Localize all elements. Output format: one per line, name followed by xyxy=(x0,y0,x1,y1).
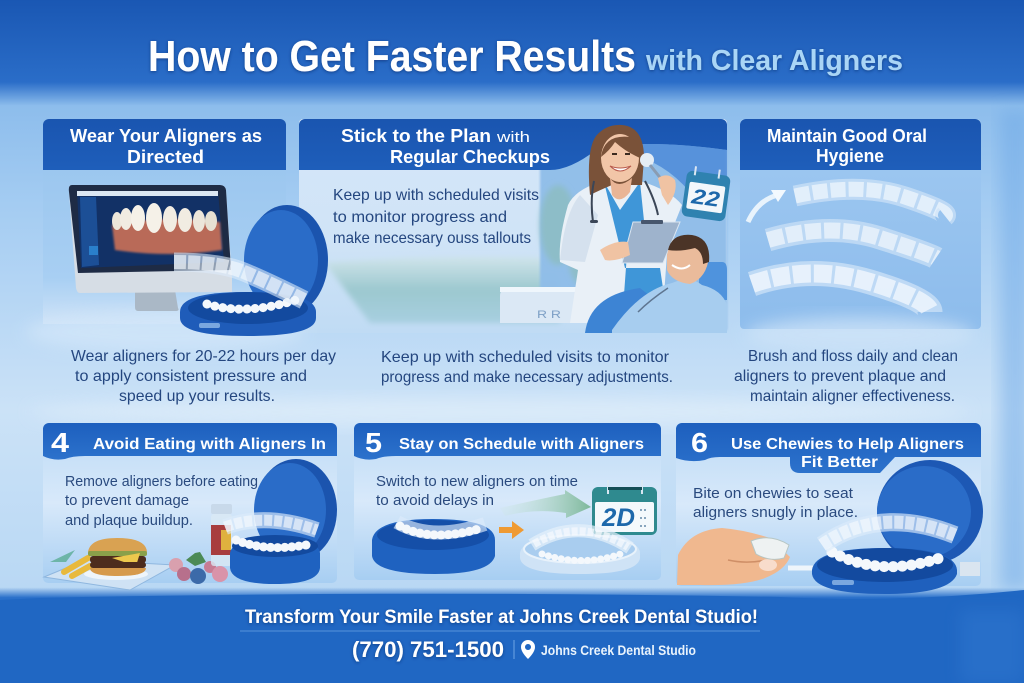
body text: aligners snugly in place. xyxy=(693,504,858,521)
caption: to apply consistent pressure and xyxy=(75,368,307,385)
studio name: Johns Creek Dental Studio xyxy=(541,642,696,658)
body text: Remove aligners before eating xyxy=(65,473,258,490)
orange arrow xyxy=(499,521,524,539)
trees xyxy=(540,185,596,285)
green arrow xyxy=(500,490,591,518)
aligner case large xyxy=(812,460,983,594)
caption: middle xyxy=(381,349,673,386)
body text: Bite on chewies to seat xyxy=(693,485,854,502)
panel: stick to the plan xyxy=(299,119,732,333)
caption: middle: progress and make necessary adjustments. xyxy=(381,369,673,386)
body text: Keep up with scheduled visits xyxy=(333,187,539,204)
icon: map pin xyxy=(521,640,535,659)
three aligners xyxy=(752,189,946,312)
panel heading: Maintain Good Oral xyxy=(767,126,927,146)
calendar 22: 22 xyxy=(689,185,721,212)
phone number: (770) 751-1500 xyxy=(352,637,504,662)
dental equipment: R R xyxy=(537,309,561,321)
calendar 2D: 2D xyxy=(601,504,635,532)
header: Avoid Eating with Aligners In xyxy=(93,436,326,453)
panel heading: Wear Your Aligners as xyxy=(70,126,262,146)
header: 5 xyxy=(365,427,382,458)
body text: to monitor progress and xyxy=(333,209,507,226)
body text: to avoid delays in xyxy=(376,492,494,509)
panel heading: Directed xyxy=(127,147,204,167)
body text xyxy=(376,473,578,509)
caption xyxy=(71,348,336,405)
header xyxy=(43,423,337,460)
header: 4 xyxy=(51,427,69,458)
body text: Switch to new aligners on time xyxy=(376,473,578,490)
panel: maintain good oral hygiene xyxy=(734,119,981,405)
aligner case xyxy=(225,459,337,584)
dentist figure xyxy=(560,125,682,323)
call to action: Transform Your Smile Faster at Johns Creek Dental Studio! xyxy=(245,607,758,628)
caption: middle: Keep up with scheduled visits to monitor xyxy=(381,349,670,366)
panel heading: with xyxy=(496,129,530,146)
body text: to prevent damage xyxy=(65,492,189,509)
berries xyxy=(169,552,228,584)
panel 5: stay on schedule xyxy=(354,423,661,580)
clipboard xyxy=(622,222,680,263)
clear aligner tray xyxy=(520,531,640,574)
panel 6: use chewies xyxy=(676,423,983,594)
caption: maintain aligner effectiveness. xyxy=(750,388,955,405)
icon: computer monitor with teeth xyxy=(69,185,232,311)
header: 6 xyxy=(691,427,708,458)
body text xyxy=(693,485,858,521)
patient xyxy=(585,235,727,333)
panel heading xyxy=(740,119,981,170)
jar xyxy=(211,504,232,566)
panel heading: Regular Checkups xyxy=(390,147,550,167)
calendar 2D xyxy=(592,480,657,535)
hand holding chewie xyxy=(677,528,825,585)
caption xyxy=(734,348,958,405)
mirror and hand xyxy=(640,153,654,167)
panel heading: Hygiene xyxy=(816,146,884,166)
header: Stay on Schedule with Aligners xyxy=(399,436,644,453)
body text: and plaque buildup. xyxy=(65,512,193,529)
header xyxy=(354,423,661,460)
calendar 22 xyxy=(681,165,732,222)
panel heading xyxy=(43,119,286,170)
body text xyxy=(65,473,258,529)
arrow xyxy=(748,190,786,222)
body text: make necessary ouss tallouts xyxy=(333,230,531,247)
food tray and burger xyxy=(44,538,175,590)
caption: Wear aligners for 20-22 hours per day xyxy=(71,348,336,365)
panel heading: Stick to the Plan xyxy=(341,126,491,146)
header: Use Chewies to Help Aligners xyxy=(731,436,964,453)
title: How to Get Faster Results xyxy=(148,32,636,81)
header xyxy=(676,423,981,473)
aligner tray blue xyxy=(372,519,495,574)
footer xyxy=(0,590,1024,683)
caption: speed up your results. xyxy=(119,388,275,405)
panel heading xyxy=(299,119,727,200)
body text xyxy=(333,187,539,247)
caption: Brush and floss daily and clean xyxy=(748,348,958,365)
caption: aligners to prevent plaque and xyxy=(734,368,946,385)
dental equipment xyxy=(500,287,600,323)
panel: wear your aligners xyxy=(25,119,336,405)
title: with Clear Aligners xyxy=(645,45,903,77)
panel 4: avoid eating xyxy=(43,423,337,590)
header: Fit Better xyxy=(801,454,878,471)
icon: aligner case open xyxy=(174,205,328,336)
